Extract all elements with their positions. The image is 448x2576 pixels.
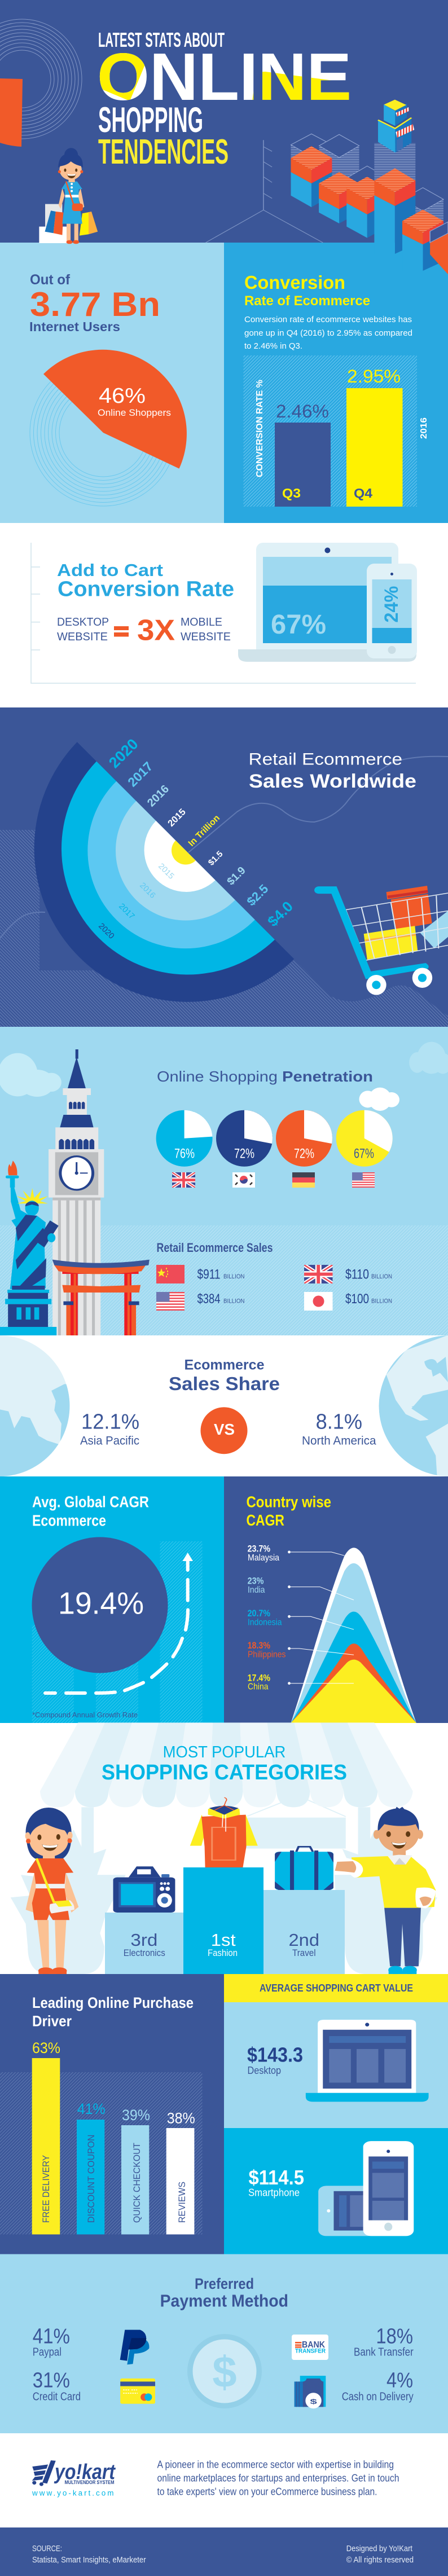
heading: conversion rate: Rate of Ecommerce xyxy=(244,293,370,309)
panel: footer xyxy=(0,2527,448,2576)
text: source xyxy=(32,2544,146,2565)
heading: leading online purchase driver: Driver xyxy=(32,2013,72,2030)
labels: years inside rings: 2015 xyxy=(156,862,175,881)
podium: 3rd electronics xyxy=(105,1913,183,1974)
equation: desktop = 3x mobile xyxy=(57,614,231,647)
illustration: axis lines and isometric buildings xyxy=(206,100,448,274)
stat: paypal: 41% xyxy=(33,2324,70,2348)
sales row: UK xyxy=(304,1265,392,1283)
icon: bank transfer: TRANSFER xyxy=(295,2348,326,2355)
bar: quick checkout 39%: 39% xyxy=(122,2107,150,2124)
icon: cash: $ xyxy=(310,2398,317,2406)
icon: shopping cart xyxy=(314,886,448,995)
stat: paypal: Paypal xyxy=(33,2346,62,2358)
heading: online shopping penetration xyxy=(157,1068,373,1085)
bar chart: conversion Q3 vs Q4: 2016 xyxy=(419,417,429,439)
stat: bank transfer xyxy=(354,2324,414,2358)
sales row: USA: $384 xyxy=(197,1291,220,1307)
heading: country wise CAGR xyxy=(246,1493,331,1529)
stat: credit card: Credit Card xyxy=(33,2391,81,2403)
logo: yokart xyxy=(32,2460,116,2497)
icon: logo cart xyxy=(32,2460,56,2486)
sales row: China: $911 xyxy=(197,1267,220,1282)
icon: cash xyxy=(295,2376,326,2408)
illustration: globe americas xyxy=(379,1335,448,1478)
decorative rings and orange block xyxy=(0,19,82,147)
ghost wireframe blocks xyxy=(291,134,443,230)
stat: paypal xyxy=(33,2324,70,2358)
illustration: plants xyxy=(11,1830,437,1974)
pie chart: UK 76%: 76% xyxy=(174,1146,195,1162)
stat circle: 19.4%: 19.4% xyxy=(58,1586,144,1621)
block A xyxy=(291,146,332,207)
label: Philippines: 18.3% xyxy=(248,1640,270,1651)
stat: desktop value: $143.3 xyxy=(247,2043,303,2066)
icon: credit card xyxy=(120,2379,155,2404)
heading: retail ecommerce sales worldwide: Sales Worldwide xyxy=(249,771,416,792)
perspective axis xyxy=(206,140,323,243)
text: source: SOURCE: xyxy=(32,2544,62,2553)
panel: ecommerce sales share xyxy=(0,1335,448,1478)
heading: out of 3.77 Bn internet users: 3.77 Bn xyxy=(30,285,160,323)
logo: yokart: MULTIVENDOR SYSTEM xyxy=(64,2480,115,2486)
stat: north america: North America xyxy=(302,1435,376,1448)
labels: years above: 2015 xyxy=(166,807,188,829)
stat: asia pacific: Asia Pacific xyxy=(80,1435,139,1448)
label: Malaysia: Malaysia xyxy=(248,1553,279,1563)
text: about paragraph: to take experts' view on your eCommerce business plan. xyxy=(157,2486,377,2497)
stat: north america: 8.1% xyxy=(316,1410,362,1434)
pie chart: Korea 72% xyxy=(216,1110,273,1167)
text: credits: © All rights reserved xyxy=(346,2555,414,2565)
podium: 3rd electronics: Electronics xyxy=(124,1948,165,1958)
heading: preferred payment method: Payment Method xyxy=(160,2291,288,2310)
illustration: globe asia xyxy=(0,1335,72,1478)
panel: most popular shopping categories xyxy=(0,1722,448,1974)
bar: free delivery 63%: 63% xyxy=(32,2039,60,2056)
sales row: Japan xyxy=(304,1291,392,1311)
heading: ecommerce sales share xyxy=(169,1357,280,1394)
stat: cash on delivery: 4% xyxy=(386,2368,413,2392)
stat: cash on delivery: Cash on Delivery xyxy=(342,2391,414,2403)
heading: avg global CAGR xyxy=(32,1493,149,1529)
flag: UK xyxy=(172,1172,195,1188)
title: LATEST STATS ABOUT xyxy=(98,28,225,51)
heading: out of 3.77 Bn internet users: Internet Users xyxy=(29,319,120,334)
block E xyxy=(402,210,443,271)
stat: asia pacific: 12.1% xyxy=(81,1410,139,1434)
labels: years above xyxy=(106,736,222,849)
labels: years inside rings: 2017 xyxy=(117,902,136,921)
panel: country wise CAGR xyxy=(224,1476,448,1723)
pie chart: Germany 72% xyxy=(276,1110,332,1167)
label: Philippines xyxy=(248,1640,286,1659)
flag: South Korea xyxy=(232,1172,255,1188)
hatched columns xyxy=(32,1541,203,1723)
pie chart: USA 67%: 67% xyxy=(354,1146,374,1162)
text: about paragraph xyxy=(157,2459,399,2497)
curved trend lines xyxy=(0,757,448,938)
icon: bank transfer xyxy=(292,2335,328,2360)
chart: online shoppers pie: 46% xyxy=(99,384,146,408)
bar chart: conversion Q3 vs Q4 xyxy=(244,355,429,507)
equation: desktop = 3x mobile: MOBILE xyxy=(181,616,222,628)
chart: online shoppers pie: Online Shoppers xyxy=(98,407,171,418)
text: conversion description: gone up in Q4 (2016) to 2.95% as compared xyxy=(244,329,412,338)
panel: conversion rate of ecommerce xyxy=(224,243,448,523)
heading: preferred payment method xyxy=(160,2275,288,2310)
title xyxy=(97,28,352,172)
bar: discount coupon 41%: DISCOUNT COUPON xyxy=(86,2135,96,2223)
block B xyxy=(319,172,359,223)
label: Malaysia: 23.7% xyxy=(248,1544,270,1554)
label: Indonesia xyxy=(248,1608,282,1627)
bar chart: conversion Q3 vs Q4: CONVERSION RATE % xyxy=(255,380,265,477)
illustration: statue of liberty xyxy=(0,1160,59,1335)
labels: years above: 2016 xyxy=(145,783,172,810)
panel: add to cart conversion rate xyxy=(0,523,448,707)
heading: average shopping cart value: AVERAGE SHOPPING CART VALUE xyxy=(260,1982,413,1994)
bar: discount coupon 41% xyxy=(77,2100,106,2234)
text: credits xyxy=(346,2544,414,2565)
stat: bank transfer: 18% xyxy=(376,2324,413,2348)
illustration: laptop 67%: 67% xyxy=(271,610,326,640)
heading: preferred payment method: Preferred xyxy=(195,2275,254,2292)
stat: credit card: 31% xyxy=(33,2368,70,2392)
icon: phones xyxy=(318,2141,414,2236)
labels: years above: 2020 xyxy=(106,736,142,771)
bar: quick checkout 39% xyxy=(121,2107,150,2234)
sales row: USA: BILLION xyxy=(223,1298,245,1304)
labels: years inside rings: 2016 xyxy=(138,881,157,900)
stat: asia pacific xyxy=(80,1410,139,1448)
heading: country wise CAGR: Country wise xyxy=(246,1493,331,1511)
title: ONLINE xyxy=(97,39,352,115)
panel: average global CAGR xyxy=(0,1476,224,1723)
labels: sales values: $1.5 xyxy=(207,849,225,868)
podium: 2nd travel xyxy=(263,1890,345,1974)
title: ONLINE xyxy=(97,39,352,115)
text: conversion description: Conversion rate of ecommerce websites has xyxy=(244,315,412,324)
equation: desktop = 3x mobile: DESKTOP xyxy=(57,616,109,628)
panel: average shopping cart value xyxy=(224,1974,448,2254)
labels: sales values: $4.0 xyxy=(264,898,296,930)
heading: online shopping penetration: Penetration xyxy=(282,1068,373,1085)
equation: desktop = 3x mobile: WEBSITE xyxy=(57,631,108,643)
podium: 2nd travel: 2nd xyxy=(289,1930,319,1950)
heading: avg global CAGR: Ecommerce xyxy=(32,1511,106,1529)
heading: retail ecommerce sales worldwide: Retail Ecommerce xyxy=(248,750,402,768)
icon: hoodie on hanger xyxy=(190,1797,258,1867)
illustration: boy xyxy=(335,1807,436,1974)
icon: paypal xyxy=(120,2330,149,2364)
text: about paragraph: online marketplaces for startups and enterprises. Get in touch xyxy=(157,2472,399,2483)
block C xyxy=(346,177,388,238)
heading: avg global CAGR: Avg. Global CAGR xyxy=(32,1493,149,1511)
bar: free delivery 63%: FREE DELIVERY xyxy=(41,2155,51,2223)
text: conversion description xyxy=(244,315,412,351)
equation: desktop = 3x mobile: 3X xyxy=(137,614,175,647)
heading: retail ecommerce sales: Retail Ecommerce Sales xyxy=(157,1241,273,1255)
chart: online shoppers pie xyxy=(30,350,187,506)
logo: yokart: www.yo-kart.com xyxy=(32,2489,114,2497)
label: India xyxy=(248,1576,265,1595)
stat: desktop value xyxy=(247,2043,303,2076)
labels: years inside rings xyxy=(96,862,175,941)
heading: retail ecommerce sales worldwide xyxy=(248,750,416,792)
bar chart: conversion Q3 vs Q4: Q4 xyxy=(354,486,372,500)
panel: hero header xyxy=(0,0,448,244)
podium: 1st fashion: 1st xyxy=(211,1930,236,1950)
labels: sales values xyxy=(207,849,296,930)
illustration: girl xyxy=(25,1808,78,1974)
block D with shop xyxy=(374,168,415,254)
bar: reviews 38% xyxy=(166,2110,195,2234)
hatched hill background xyxy=(0,830,448,1027)
illustration: shop awning and backdrop xyxy=(40,1722,413,1892)
pie chart: UK 76% xyxy=(156,1110,213,1167)
chart axis lines xyxy=(31,543,416,683)
badge: vs xyxy=(201,1407,247,1454)
icon: suitcase xyxy=(275,1847,333,1890)
pie chart: Germany 72%: 72% xyxy=(294,1146,314,1162)
title: SHOPPING xyxy=(98,100,203,140)
sales row: UK: $110 xyxy=(345,1267,369,1282)
text: source: Statista, Smart Insights, eMarketer xyxy=(32,2555,146,2565)
labels: sales values: $2.5 xyxy=(244,882,271,909)
stat: smartphone value: $114.5 xyxy=(248,2166,304,2189)
bar: free delivery 63% xyxy=(32,2039,60,2234)
sales row: USA xyxy=(156,1291,245,1311)
sales row: Japan: $100 xyxy=(345,1291,369,1307)
text: credits: Designed by Yo!Kart xyxy=(346,2544,413,2553)
chart: nested mountains xyxy=(291,1548,416,1723)
text: about paragraph: A pioneer in the ecommerce sector with expertise in building xyxy=(157,2459,394,2471)
heading: out of 3.77 Bn internet users xyxy=(29,272,160,334)
bar chart: conversion Q3 vs Q4: Q3 xyxy=(282,486,301,500)
bar: reviews 38%: 38% xyxy=(167,2110,195,2127)
equation: desktop = 3x mobile: WEBSITE xyxy=(181,631,231,643)
stat: bank transfer: Bank Transfer xyxy=(354,2346,414,2358)
heading: most popular shopping categories xyxy=(102,1743,347,1784)
panel: retail ecommerce sales worldwide xyxy=(0,707,448,1027)
label: China: China xyxy=(248,1682,269,1692)
label: Philippines: Philippines xyxy=(248,1650,286,1659)
icon: tower shop xyxy=(378,100,414,153)
illustration: laptop 67% xyxy=(238,543,416,662)
podium: 3rd electronics: 3rd xyxy=(130,1930,157,1950)
sales row: China xyxy=(156,1265,245,1283)
panel: preferred payment method xyxy=(0,2254,448,2433)
bar: reviews 38%: REVIEWS xyxy=(177,2182,187,2223)
label: India: India xyxy=(248,1585,265,1595)
heading: add to cart conversion rate: Add to Cart xyxy=(57,560,163,580)
heading: ecommerce sales share: Sales Share xyxy=(169,1373,280,1394)
heading: out of 3.77 Bn internet users: Out of xyxy=(30,272,71,288)
block F xyxy=(430,222,448,274)
podium: 2nd travel: Travel xyxy=(292,1948,316,1958)
stat: credit card xyxy=(33,2368,81,2403)
panel: about yokart xyxy=(0,2433,448,2527)
label: India: 23% xyxy=(248,1576,263,1586)
label: Indonesia: 20.7% xyxy=(248,1608,270,1619)
hatched background xyxy=(0,2072,202,2234)
labels: years above: In Trillion xyxy=(187,814,222,849)
illustration: big ben xyxy=(49,1049,104,1335)
illustration: torii gate xyxy=(52,1260,150,1335)
icon: dollar coin xyxy=(187,2334,262,2408)
leader lines xyxy=(288,1551,354,1685)
heading: add to cart conversion rate: Conversion Rate xyxy=(58,578,234,601)
chart: semicircle sales rings xyxy=(34,742,294,1002)
pie chart: USA 67% xyxy=(336,1110,393,1167)
bar: quick checkout 39%: QUICK CHECKOUT xyxy=(131,2143,142,2223)
icon: camera xyxy=(113,1866,175,1913)
heading: add to cart conversion rate xyxy=(57,560,234,601)
arrow: dashed growth curve xyxy=(45,1553,193,1693)
text: conversion description: to 2.46% in Q3. xyxy=(244,342,302,351)
labels: years inside rings: 2020 xyxy=(96,922,116,941)
labels: sales values: $1.9 xyxy=(225,865,248,888)
flag: USA xyxy=(352,1172,375,1188)
icon: bank transfer: BANK xyxy=(302,2340,325,2350)
heading: ecommerce sales share: Ecommerce xyxy=(184,1357,265,1373)
illustration: woman with shopping bags xyxy=(39,148,98,244)
sales row: Japan: BILLION xyxy=(371,1298,392,1304)
logo: yokart: yo!kart xyxy=(54,2460,116,2484)
illustration: phone 24%: 24% xyxy=(381,586,402,623)
pie chart: Korea 72%: 72% xyxy=(234,1146,254,1162)
label: Indonesia: Indonesia xyxy=(248,1617,282,1627)
bar chart: conversion Q3 vs Q4: 2.46% xyxy=(276,401,329,421)
stat circle: 19.4% xyxy=(32,1537,168,1673)
illustration: phone 24% xyxy=(367,564,417,658)
footnote: compound annual growth rate: *Compound Annual Growth Rate xyxy=(32,1711,138,1719)
label: Malaysia xyxy=(248,1544,279,1563)
heading: conversion rate xyxy=(244,272,370,309)
title: TENDENCIES xyxy=(98,133,229,172)
badge: vs: VS xyxy=(214,1421,235,1438)
panel: internet users xyxy=(0,243,224,523)
heading: leading online purchase driver: Leading Online Purchase xyxy=(32,1994,194,2011)
label: China: 17.4% xyxy=(248,1672,270,1683)
sales row: UK: BILLION xyxy=(371,1273,392,1280)
heading: country wise CAGR: CAGR xyxy=(246,1511,284,1529)
icon: laptop xyxy=(306,2020,429,2102)
heading: most popular shopping categories: SHOPPING CATEGORIES xyxy=(102,1761,347,1784)
sales row: China: BILLION xyxy=(223,1273,245,1280)
label: China xyxy=(248,1672,270,1692)
podium: 1st fashion xyxy=(183,1867,263,1974)
heading: conversion rate: Conversion xyxy=(244,272,345,293)
bar: discount coupon 41%: 41% xyxy=(77,2100,106,2117)
podium: 1st fashion: Fashion xyxy=(208,1948,238,1958)
stat: desktop value: Desktop xyxy=(247,2065,281,2076)
panel: leading online purchase driver xyxy=(0,1974,224,2254)
flag: Germany xyxy=(292,1172,315,1188)
icon: dollar coin: $ xyxy=(212,2347,237,2397)
stat: smartphone value xyxy=(248,2166,304,2198)
panel: online shopping penetration and retail sales xyxy=(0,1027,448,1335)
clouds xyxy=(0,1042,448,1111)
heading: most popular shopping categories: MOST POPULAR xyxy=(163,1743,286,1761)
labels: years above: 2017 xyxy=(125,759,156,790)
stat: north america xyxy=(302,1410,376,1448)
bar chart: conversion Q3 vs Q4: 2.95% xyxy=(347,366,401,386)
heading: leading online purchase driver xyxy=(32,1994,194,2030)
heading: online shopping penetration: Online Shopping xyxy=(157,1068,278,1085)
stat: smartphone value: Smartphone xyxy=(248,2187,300,2198)
stat: cash on delivery xyxy=(342,2368,414,2403)
